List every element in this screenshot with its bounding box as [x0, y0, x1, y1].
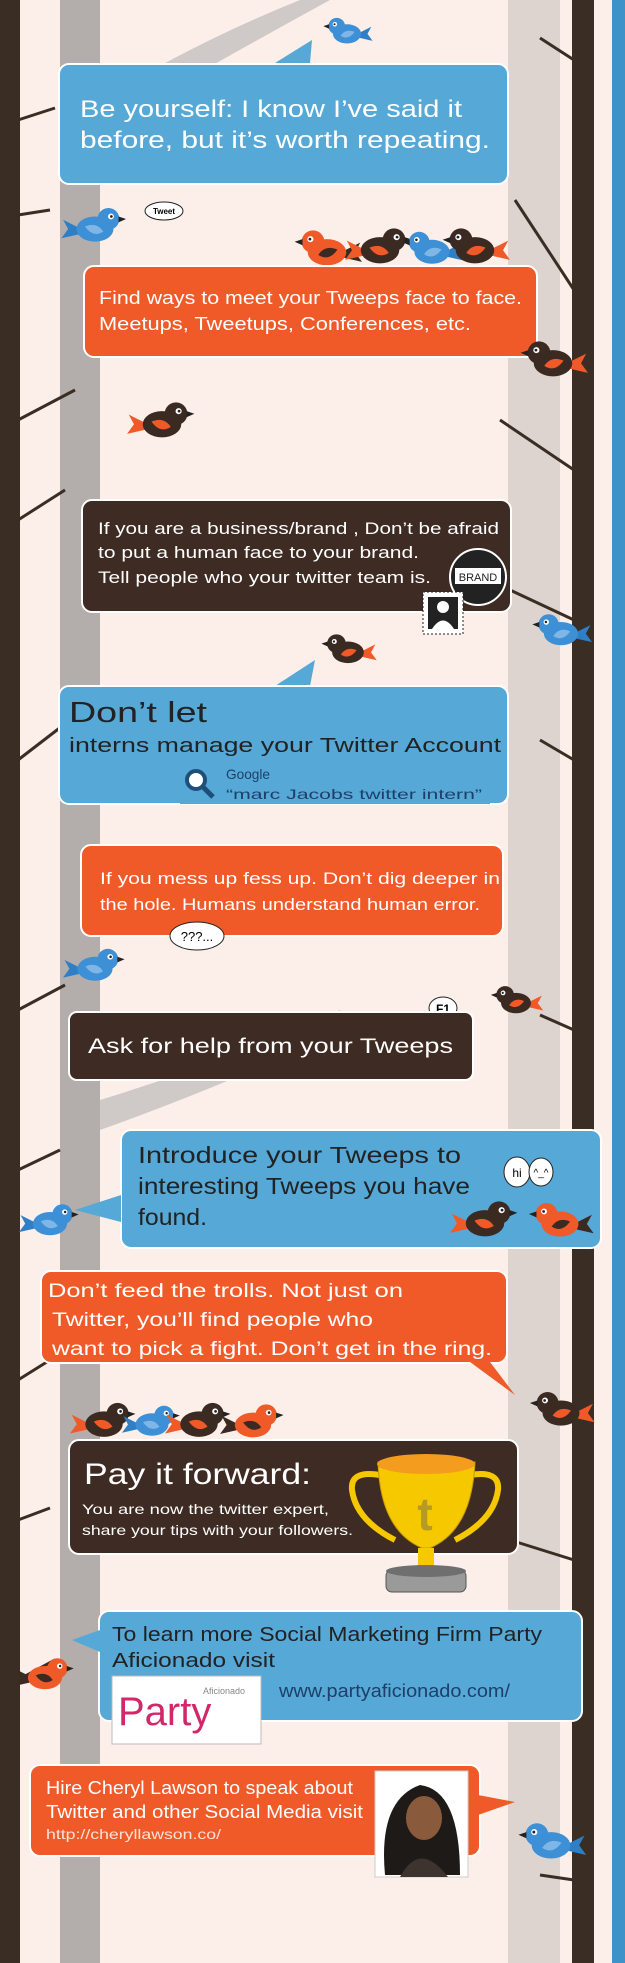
panel: human face brand: to put a human face to your brand. [98, 543, 419, 562]
panel: hire cheryl: http://cheryllawson.co/ [46, 1826, 221, 1842]
panel: be yourself: Be yourself: I know I’ve said it [80, 96, 462, 123]
panel: mess up: If you mess up fess up. Don’t dig deeper in [100, 869, 500, 888]
panel: ask for help [69, 1012, 473, 1080]
panel: introduce tweeps: Introduce your Tweeps to [138, 1142, 461, 1168]
panel: party aficionado [72, 1611, 582, 1744]
icon: two birds saying hi: ^_^ [534, 1168, 549, 1179]
icon: brown bird above interns [275, 634, 377, 686]
panel: mess up [81, 845, 503, 936]
panel: hire cheryl [30, 1765, 515, 1877]
panel: party aficionado: To learn more Social Marketing Firm Party [112, 1624, 542, 1646]
icon: blue bird with ??? bubble: ???... [181, 929, 213, 944]
icon: stamp face [423, 592, 463, 634]
icon: top blue bird [275, 18, 373, 63]
panel: pay it forward: You are now the twitter expert, [82, 1501, 329, 1517]
icon: F1 bird: F1 [436, 1002, 450, 1016]
panel: ask for help: Ask for help from your Tweeps [88, 1035, 453, 1058]
panel: interns: Google [226, 766, 270, 782]
panel: party aficionado: Aficionado visit [112, 1650, 276, 1672]
panel: interns: interns manage your Twitter Account [69, 735, 502, 757]
panel: pay it forward [69, 1440, 518, 1592]
panel: introduce tweeps: interesting Tweeps you have [138, 1173, 470, 1199]
icon: two birds saying hi [450, 1157, 594, 1237]
panel: introduce tweeps: found. [138, 1204, 207, 1230]
icon: brand badge [450, 549, 506, 605]
panel: human face brand: Tell people who your twitter team is. [98, 568, 431, 587]
icon: brown bird right [521, 341, 588, 376]
panel: party aficionado: www.partyaficionado.com/ [278, 1681, 510, 1701]
panel: pay it forward: Pay it forward: [84, 1458, 311, 1491]
panel: human face brand [82, 500, 511, 634]
icon: blue bird right [532, 614, 592, 645]
panel: meet tweeps [84, 266, 537, 357]
panel: be yourself [59, 64, 508, 184]
icon: brown bird right trolls [530, 1392, 595, 1426]
icon: brand badge: BRAND [459, 572, 497, 584]
icon: F1 bird [429, 986, 543, 1019]
photo: portrait [375, 1771, 468, 1877]
icon: party logo: Aficionado [203, 1686, 245, 1696]
icon: trophy [352, 1454, 498, 1592]
panel: interns: “marc Jacobs twitter intern” [226, 786, 483, 802]
icon: row of birds above pay it forward [70, 1403, 284, 1437]
icon: blue bird with tweet bubble [61, 202, 183, 242]
icon: trophy: t [417, 1488, 433, 1540]
panel: be yourself: before, but it’s worth repeating. [80, 127, 490, 154]
panel: human face brand: If you are a business/brand , Don’t be afraid [98, 519, 499, 538]
icon: blue bird with tweet bubble: Tweet [153, 207, 175, 216]
panel: meet tweeps: Find ways to meet your Tweeps face to face. [99, 288, 522, 308]
panel: pay it forward: share your tips with your followers. [82, 1522, 353, 1538]
icon: orange bird left [14, 1658, 74, 1689]
panel: hire cheryl: Hire Cheryl Lawson to speak about [46, 1778, 353, 1798]
panel: trolls: want to pick a fight. Don’t get in the ring. [51, 1339, 492, 1360]
icon: magnifier [187, 771, 213, 797]
panel: interns: Don’t let [69, 697, 207, 729]
panel: meet tweeps: Meetups, Tweetups, Conferences, etc. [99, 314, 471, 334]
panel: trolls [41, 1271, 515, 1395]
icon: blue bird left intro [19, 1195, 121, 1235]
icon: party logo [112, 1676, 261, 1744]
panel: interns [59, 686, 508, 804]
icon: two birds saying hi: hi [512, 1166, 522, 1180]
icon: blue bird with ??? bubble [63, 922, 224, 981]
icon: party logo: Party [118, 1690, 211, 1734]
icon: flying brown bird [127, 402, 194, 437]
panel: introduce tweeps [121, 1130, 601, 1248]
panel: trolls: Don’t feed the trolls. Not just on [48, 1281, 403, 1302]
panel: hire cheryl: Twitter and other Social Media visit [46, 1802, 363, 1822]
panel: mess up: the hole. Humans understand human error. [100, 895, 480, 914]
panel: trolls: Twitter, you’ll find people who [52, 1310, 373, 1331]
icon: row of birds [295, 228, 510, 265]
icon: blue bird right bottom [518, 1823, 586, 1858]
